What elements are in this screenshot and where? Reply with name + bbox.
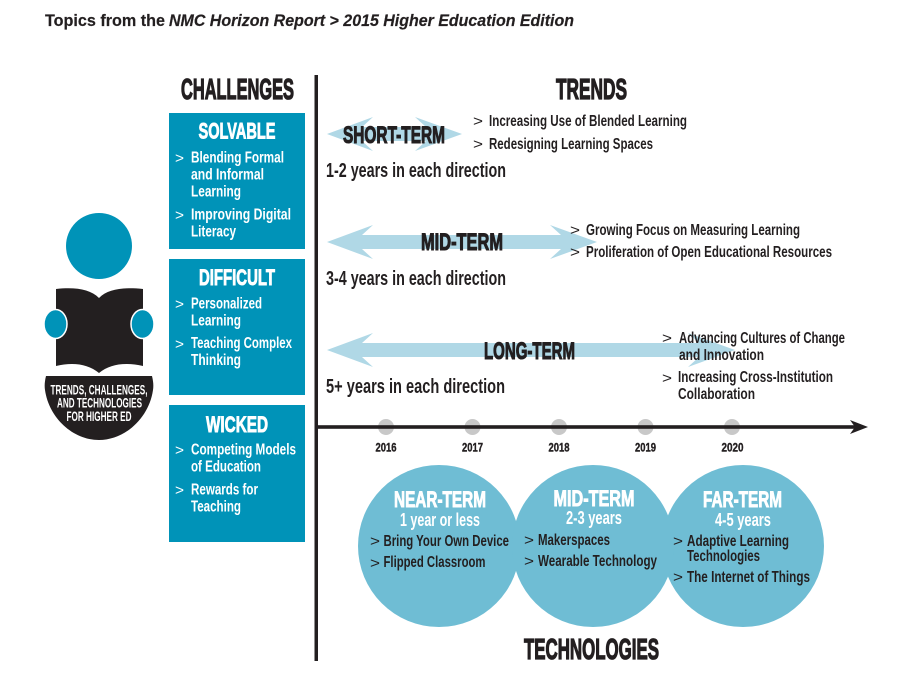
technologies: mid-term: Wearable Technology: [538, 553, 657, 570]
technologies: mid-term: [524, 486, 657, 570]
trend items: short-term: Redesigning Learning Spaces: [489, 136, 653, 153]
panel: solvable: Literacy: [191, 224, 236, 240]
trend items: long-term: [662, 330, 845, 403]
trend items: short-term: >: [473, 136, 483, 153]
panel: solvable: >: [175, 207, 184, 224]
badge: trends, challenges and technologies: AND TECHNOLOGIES: [57, 396, 142, 410]
panel: solvable: Learning: [191, 184, 241, 200]
panel: difficult: >: [175, 296, 184, 313]
badge: trends, challenges and technologies: [45, 376, 153, 440]
circle: far-term: [662, 465, 824, 627]
duration: long-term: 5+ years in each direction: [326, 376, 505, 398]
trend items: mid-term: Growing Focus on Measuring Learning: [586, 222, 800, 239]
trend items: long-term: and Innovation: [679, 347, 764, 364]
trend items: long-term: >: [662, 370, 672, 387]
trend items: short-term: Increasing Use of Blended Learning: [489, 113, 687, 130]
trend items: long-term: Collaboration: [678, 386, 755, 403]
trend items: mid-term: [570, 222, 832, 261]
technologies: far-term: >: [673, 569, 683, 586]
technologies: far-term: The Internet of Things: [687, 569, 810, 586]
panel: wicked: WICKED: [206, 412, 268, 437]
technologies: far-term: 4-5 years: [715, 510, 771, 530]
panel: wicked: Competing Models: [191, 442, 296, 458]
technologies: mid-term: >: [524, 553, 534, 570]
icon: left hand: [44, 310, 67, 338]
panel: wicked: [169, 405, 305, 542]
badge: trends, challenges and technologies: TRENDS, CHALLENGES,: [50, 382, 148, 398]
panel: difficult: Teaching Complex: [191, 335, 292, 352]
panel: solvable: [169, 113, 305, 249]
technologies: mid-term: >: [524, 532, 534, 549]
timeline: 2018: [548, 440, 570, 454]
panel: difficult: Thinking: [191, 352, 241, 369]
icon: open book: [56, 288, 143, 373]
duration: short-term: 1-2 years in each direction: [326, 160, 506, 182]
circle: mid-term: [512, 465, 674, 627]
panel: solvable: Improving Digital: [191, 206, 291, 224]
panel: solvable: >: [175, 150, 184, 167]
panel: solvable: and Informal: [191, 166, 264, 184]
timeline: 2020: [722, 440, 744, 454]
technologies: mid-term: MID-TERM: [554, 486, 634, 511]
panel: wicked: Teaching: [191, 498, 241, 516]
panel: wicked: >: [175, 482, 184, 499]
panel: difficult: [169, 259, 305, 395]
trend items: mid-term: >: [570, 244, 580, 261]
panel: wicked: Rewards for: [191, 482, 258, 498]
trend items: short-term: >: [473, 113, 483, 130]
technologies: mid-term: 2-3 years: [566, 508, 622, 528]
technologies: near-term: >: [370, 533, 380, 550]
title: NMC Horizon Report > 2015 Higher Education Edition: [169, 11, 574, 30]
vertical axis: [314, 75, 318, 661]
technologies: far-term: Technologies: [687, 548, 760, 565]
technologies: near-term: [370, 487, 509, 572]
technologies: mid-term: Makerspaces: [538, 532, 610, 549]
heading: technologies: TECHNOLOGIES: [524, 634, 659, 666]
technologies: near-term: >: [370, 555, 380, 572]
panel: difficult: DIFFICULT: [199, 265, 275, 290]
trend items: long-term: >: [662, 330, 672, 347]
panel: wicked: of Education: [191, 458, 261, 476]
arrow: short-term: [327, 117, 462, 151]
label: long-term: LONG-TERM: [484, 338, 575, 365]
trend items: mid-term: >: [570, 222, 580, 239]
timeline: [316, 419, 868, 454]
panel: solvable: SOLVABLE: [198, 118, 276, 144]
panel: difficult: >: [175, 336, 184, 353]
icon: head: [66, 213, 132, 279]
technologies: near-term: Bring Your Own Device: [384, 533, 509, 550]
title: Topics from the: [45, 11, 165, 30]
heading: challenges: CHALLENGES: [181, 74, 294, 106]
timeline: 2016: [376, 440, 397, 454]
technologies: near-term: Flipped Classroom: [384, 554, 486, 571]
technologies: far-term: >: [673, 533, 683, 550]
panel: difficult: Learning: [191, 312, 241, 330]
technologies: far-term: FAR-TERM: [703, 487, 782, 512]
circle: near-term: [358, 465, 520, 627]
trend items: long-term: Increasing Cross-Institution: [678, 369, 833, 386]
panel: solvable: Blending Formal: [191, 150, 284, 166]
label: mid-term: MID-TERM: [421, 229, 503, 256]
icon: person reading a book: [44, 213, 154, 440]
trend items: short-term: [473, 113, 687, 153]
technologies: near-term: NEAR-TERM: [394, 487, 486, 512]
heading: trends: TRENDS: [556, 74, 627, 106]
technologies: near-term: 1 year or less: [400, 510, 480, 530]
panel: difficult: Personalized: [191, 296, 262, 312]
panel: wicked: >: [175, 442, 184, 459]
timeline: 2019: [635, 440, 656, 454]
timeline: 2017: [462, 440, 483, 454]
badge: trends, challenges and technologies: FOR HIGHER ED: [66, 409, 132, 424]
arrow: long-term: [327, 333, 735, 367]
duration: mid-term: 3-4 years in each direction: [326, 268, 506, 290]
label: short-term: SHORT-TERM: [343, 122, 445, 149]
technologies: far-term: Adaptive Learning: [687, 533, 789, 550]
technologies: far-term: [673, 487, 810, 586]
arrow: mid-term: [327, 225, 597, 259]
icon: right hand: [131, 310, 154, 338]
